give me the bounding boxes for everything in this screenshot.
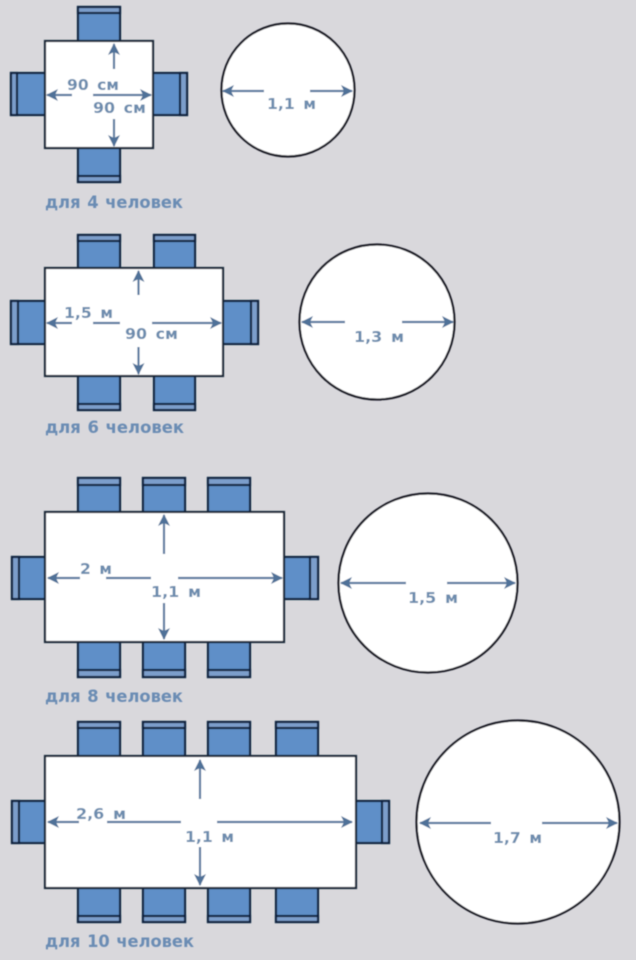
rectangular table top — [45, 756, 356, 888]
round table 1,3 m — [300, 244, 454, 400]
round table 1,1 m — [222, 24, 354, 156]
rectangular table top — [45, 512, 284, 642]
caption: for 6 people: для 6 человек — [45, 418, 184, 437]
chair: right — [153, 73, 187, 115]
width label: 1,1 м — [151, 583, 201, 601]
chair: left — [12, 557, 45, 599]
chair: bottom — [78, 148, 120, 182]
caption: for 8 people: для 8 человек — [45, 687, 183, 706]
chair: right — [284, 557, 318, 599]
round table 1,1 m: 1,1 м — [267, 95, 316, 113]
round table 1,5 m: 1,5 м — [408, 589, 458, 607]
diagram: table for 8 people — [12, 478, 318, 677]
chair: right — [223, 301, 258, 344]
rectangular table top — [45, 268, 223, 376]
length label: 2,6 м — [76, 805, 126, 823]
length label: 2 м — [80, 560, 112, 578]
square table top — [45, 41, 153, 148]
chair: left — [12, 801, 45, 843]
chair: left — [11, 73, 45, 115]
round table 1,5 m — [338, 494, 518, 672]
round table 1,3 m: 1,3 м — [354, 328, 404, 346]
dimension arrows — [48, 515, 282, 639]
caption: for 10 people: для 10 человек — [45, 932, 194, 951]
width label: 90 см — [67, 76, 119, 94]
top chairs — [78, 722, 318, 756]
width label: 90 см — [125, 325, 178, 343]
round table 1,7 m — [416, 720, 620, 924]
chair: top — [78, 7, 120, 41]
length label: 1,5 м — [64, 304, 113, 322]
chair: left — [11, 301, 45, 344]
diagram: table for 6 people — [11, 235, 258, 410]
depth label: 90 см — [93, 99, 146, 117]
top chairs — [78, 478, 250, 512]
bottom chairs — [78, 888, 318, 922]
width label: 1,1 м — [185, 828, 234, 846]
diagram: table for 10 people — [12, 722, 389, 922]
diagram: table for 4 people — [11, 7, 187, 182]
round table 1,7 m: 1,7 м — [493, 829, 542, 847]
dimension arrows — [47, 44, 151, 146]
dimension arrows — [47, 271, 221, 374]
bottom chairs — [78, 642, 250, 677]
caption: for 4 people: для 4 человек — [45, 193, 183, 212]
bottom chairs — [78, 376, 195, 410]
chair: right — [356, 801, 389, 843]
dimension arrows — [48, 760, 352, 885]
top chairs — [78, 235, 195, 268]
